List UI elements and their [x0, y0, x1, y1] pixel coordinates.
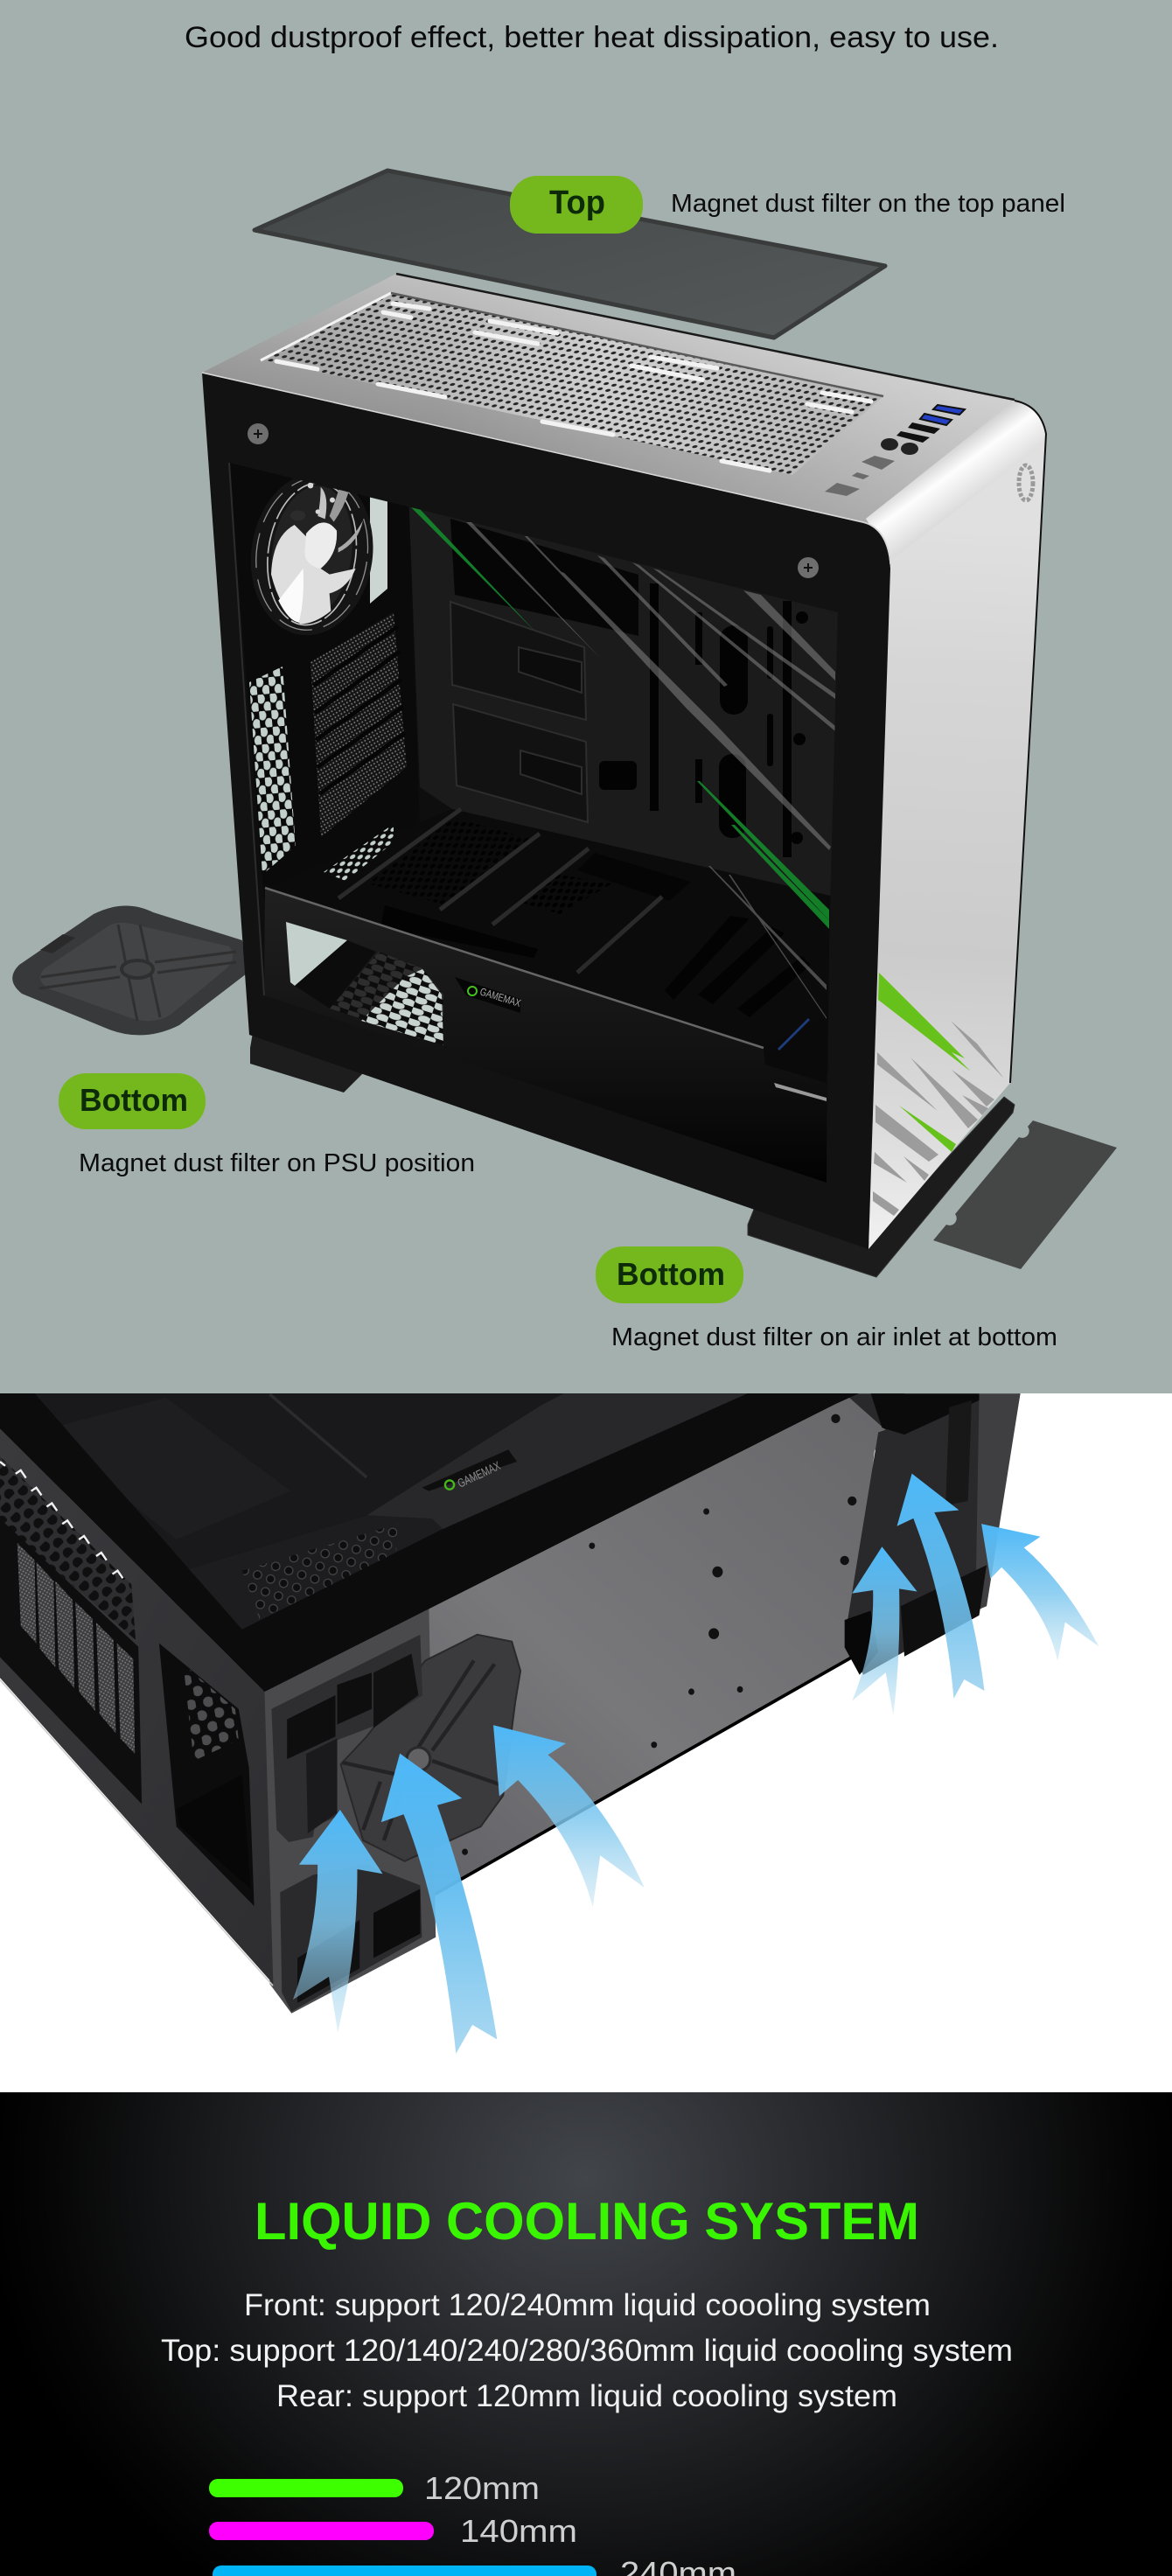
PCI slot covers [310, 612, 407, 837]
label: top: Top [549, 185, 605, 221]
panel: airflow photo [0, 1393, 1172, 2092]
front foot upper [271, 1635, 422, 1842]
side logo [1019, 465, 1033, 500]
rear opening [370, 497, 387, 604]
PSU shroud [264, 888, 827, 1183]
motherboard tray [408, 490, 838, 896]
corner underlay [263, 1605, 436, 2014]
rear hex vent [0, 1456, 136, 1640]
CPU cutout [450, 519, 638, 636]
tray cutouts [599, 583, 808, 857]
rear side opening [159, 1644, 255, 1906]
arrow 3 [493, 1725, 645, 1907]
top surface underlay [0, 1391, 865, 1692]
floor slots [380, 905, 811, 1017]
underside GAMEMAX badge text: GAMEMAX [456, 1458, 503, 1490]
window glass [35, 1393, 748, 1630]
arrow 4 [852, 1546, 917, 1715]
rear panel of case [0, 1428, 273, 1986]
PSU vent hexes [330, 952, 443, 1045]
case interior window [229, 463, 838, 1183]
arrow 5 [897, 1474, 985, 1699]
screw left [248, 423, 269, 444]
text: rear support: Rear: support 120mm liquid coooling system [276, 2379, 897, 2413]
left magnetic dust filter [12, 905, 247, 1035]
text: front support: Front: support 120/240mm liquid coooling system [244, 2288, 931, 2322]
text: top support: Top: support 120/140/240/280/360mm liquid coooling system [161, 2334, 1013, 2368]
glass reflections [466, 522, 835, 1019]
legend: 240mm [213, 2555, 736, 2576]
legend: 140mm: 140mm [460, 2513, 577, 2549]
arrow 6 [981, 1524, 1099, 1661]
top mesh [261, 292, 883, 475]
heading: dustproof summary: Good dustproof effect, better heat dissipation, easy to use. [185, 21, 999, 54]
legend: 140mm [209, 2513, 577, 2549]
black frame band [0, 1393, 853, 1692]
PSU intake filter [340, 1635, 520, 1861]
legend: 120mm [209, 2470, 540, 2506]
case underside [0, 1391, 1099, 2054]
bottom air inlet dust filter [933, 1120, 1117, 1269]
caption: air inlet filter: Magnet dust filter on air inlet at bottom [611, 1323, 1057, 1351]
arrow 2 [381, 1754, 497, 2054]
rear panel [229, 463, 420, 901]
front IO ports [825, 405, 965, 496]
window inner edge [229, 463, 264, 995]
caption: PSU filter: Magnet dust filter on PSU position [79, 1149, 475, 1177]
drive bay plates [450, 602, 588, 822]
floor perforations [324, 809, 691, 973]
mesh mounting slots [276, 304, 871, 471]
arrow 1 [293, 1810, 383, 2033]
screw right [798, 557, 819, 578]
label: bottom air inlet: Bottom [617, 1256, 725, 1292]
panel: dust filter background [0, 0, 1172, 1393]
case floor [265, 809, 831, 1076]
rear fan [251, 479, 373, 635]
right base of case [748, 1097, 1015, 1277]
caption: top filter: Magnet dust filter on the top panel [671, 190, 1065, 218]
title: liquid cooling system: LIQUID COOLING SYSTEM [255, 2192, 919, 2251]
top dust filter sheet [255, 171, 885, 338]
underside panel [429, 1393, 904, 1896]
case top panel [202, 274, 1023, 562]
case side panel with graphics [866, 401, 1046, 1249]
right feet and front edge [845, 1393, 1021, 1675]
vented hex strip [249, 667, 296, 875]
label: bottom air inlet [596, 1246, 743, 1303]
GAMEMAX badge [467, 986, 521, 1007]
left foot of case [250, 1028, 367, 1093]
label: bottom PSU [59, 1073, 206, 1129]
green reflections [411, 507, 829, 929]
case front frame [202, 373, 890, 1249]
legend: 120mm: 120mm [424, 2470, 540, 2506]
label: top [510, 176, 643, 234]
front foot lower [280, 1865, 422, 2012]
GAMEMAX badge: GAMEMAX [478, 985, 522, 1009]
label: bottom PSU: Bottom [80, 1082, 188, 1118]
panel: liquid cooling [0, 2092, 1172, 2576]
PCI opening [0, 1518, 142, 1805]
left corner of case [0, 1391, 865, 2014]
